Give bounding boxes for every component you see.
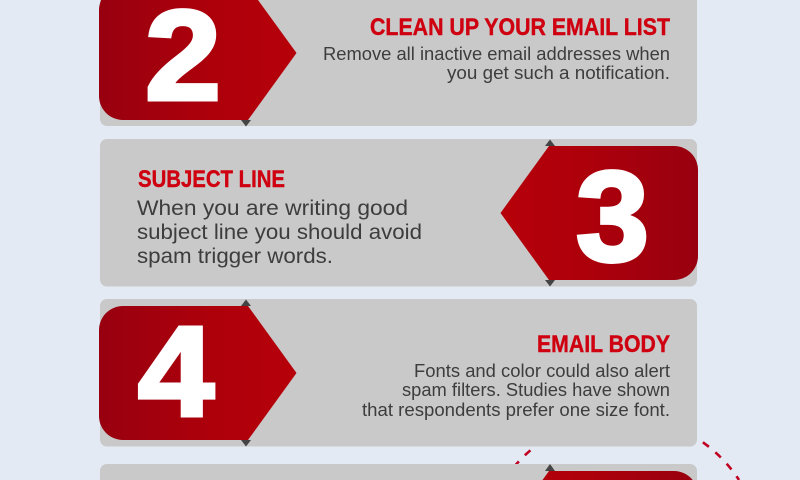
step 3 description: When you are writing good xyxy=(137,197,408,220)
step 4 description: Fonts and color could also alert xyxy=(414,361,670,381)
step 2 description: Remove all inactive email addresses when xyxy=(323,44,670,64)
step 4 fold markers xyxy=(241,300,251,446)
panel: step 4 email body xyxy=(99,299,697,446)
step 2 description xyxy=(323,44,670,83)
step 3 description: spam trigger words. xyxy=(137,245,333,268)
step 4 heading: EMAIL BODY xyxy=(537,331,670,358)
step 3 description: subject line you should avoid xyxy=(137,221,422,244)
dashed circle decoration xyxy=(510,442,739,480)
step 2 fold marker xyxy=(241,120,251,126)
panel: step 2 clean up your email list xyxy=(99,0,697,128)
step 2 red arrow badge xyxy=(99,0,296,120)
panel: step 5 partial xyxy=(100,464,697,480)
step 4 description: that respondents prefer one size font. xyxy=(362,400,670,420)
step 3 description xyxy=(137,197,422,268)
step 4 description xyxy=(362,361,670,420)
step 3 heading: SUBJECT LINE xyxy=(138,166,285,193)
step 4 red arrow badge xyxy=(99,306,296,440)
step 5 fold marker xyxy=(545,464,555,471)
step 2 heading: CLEAN UP YOUR EMAIL LIST xyxy=(370,14,670,41)
step 4 description: spam filters. Studies have shown xyxy=(402,380,670,400)
step 4 numeral: 4 xyxy=(138,300,214,444)
step 2 description: you get such a notification. xyxy=(447,63,670,83)
step 3 red arrow badge xyxy=(500,146,698,280)
step 5 red arrow badge xyxy=(542,471,693,480)
step 3 numeral: 3 xyxy=(576,146,649,288)
step 3 fold markers xyxy=(545,140,555,286)
panel: step 3 subject line xyxy=(100,139,698,288)
